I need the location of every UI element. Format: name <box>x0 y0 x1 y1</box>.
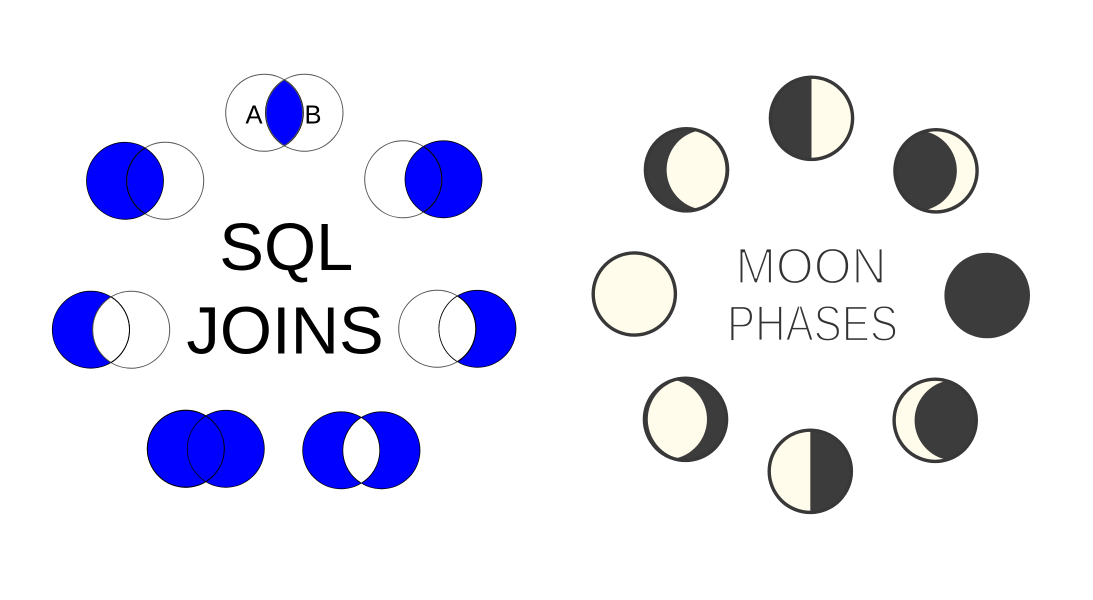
venn: inner join: B <box>304 101 322 129</box>
title: MOON: MOON <box>736 237 886 294</box>
venn: left join <box>86 142 204 219</box>
venn: inner join: A <box>246 101 263 129</box>
moon: gibbous lit right <box>645 129 728 211</box>
venn: full outer join <box>147 410 264 487</box>
venn: left anti join <box>52 291 170 368</box>
panel: SQL joins <box>52 74 516 489</box>
moon: crescent lit right <box>895 130 977 212</box>
venn: right anti join <box>399 290 516 367</box>
moon: first quarter dark left <box>770 77 853 160</box>
panel: moon phases <box>593 77 1030 513</box>
moon: crescent lit left <box>894 379 976 461</box>
moon: new <box>944 253 1030 338</box>
moon: full <box>593 253 675 335</box>
title: SQL: SQL <box>219 210 353 285</box>
moon: last quarter dark right <box>769 430 852 513</box>
venn: full anti join <box>303 412 420 489</box>
title: PHASES: PHASES <box>727 295 898 352</box>
venn: right join <box>365 141 482 218</box>
moon: gibbous lit left <box>644 378 727 460</box>
title: JOINS: JOINS <box>186 293 384 368</box>
venn: inner join <box>226 74 343 151</box>
